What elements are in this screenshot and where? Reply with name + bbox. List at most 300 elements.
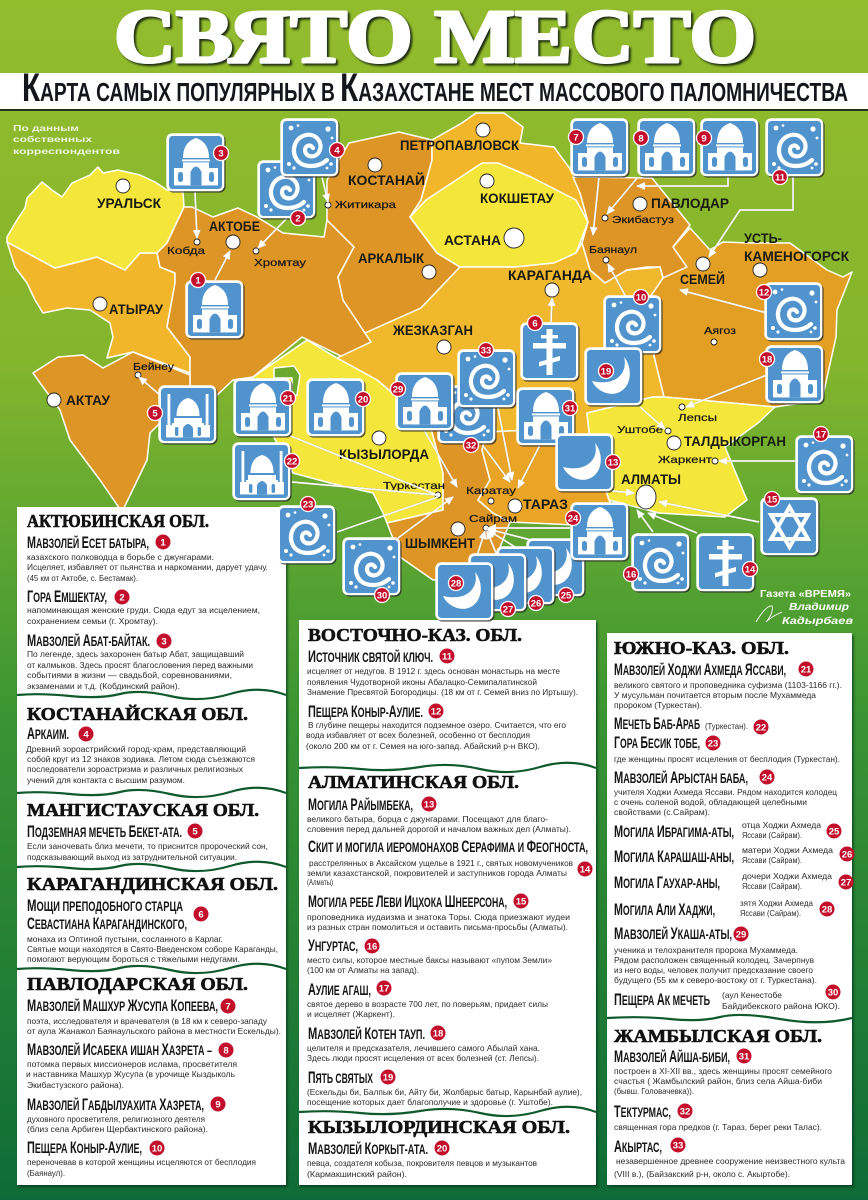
item 27: МОГИЛА ГАУХАР-АНЫ, (614, 874, 720, 892)
icon 21: mausoleum: 21 (283, 394, 294, 404)
arrow 19 (640, 407, 665, 429)
icon 8: mausoleum (634, 118, 697, 178)
icon 20: mausoleum (306, 378, 370, 438)
icon 1: mausoleum: 1 (195, 276, 201, 286)
arrow 28 (475, 531, 485, 562)
region: Павлодар (573, 177, 690, 283)
arrow 5 (139, 377, 160, 395)
item 9: 9 (215, 1100, 221, 1110)
item 10: ПЕЩЕРА КОНЫР-АУЛИЕ, (27, 1139, 142, 1157)
item 33: АКЫРТАС, (614, 1138, 662, 1156)
arrow 26 (488, 530, 515, 547)
icon 5: mosque (148, 385, 218, 445)
icon 19: crescent (584, 347, 644, 407)
arrow 9 (637, 177, 728, 186)
item 13: словения перед дальней дорогой и началом важных дел (Алматы). (307, 824, 571, 834)
city labels: КОКШЕТАУ (480, 190, 554, 206)
item 31: 31 (739, 1052, 750, 1062)
arrow 30 (398, 497, 453, 538)
icon 5: mosque: 5 (152, 408, 158, 420)
city labels: Кобда (167, 245, 205, 257)
icon 30: spiral: 30 (377, 590, 387, 602)
item 33 (614, 1138, 845, 1179)
arrow 25 (488, 529, 531, 540)
icon 17: spiral: 17 (816, 430, 826, 440)
item 25 (614, 820, 842, 841)
item 13: МОГИЛА РАЙЫМБЕКА, (308, 796, 413, 814)
item 18: МАВЗОЛЕЙ КОТЕН ТАУП. (308, 1025, 425, 1043)
arrow 33 (498, 408, 512, 480)
panel: middle column (299, 620, 596, 1185)
subtitle band (0, 66, 868, 111)
item 7: поэта, исследователя и врачевателя (в 18 км к северо-западу (27, 1016, 268, 1026)
item 1: МАВЗОЛЕЙ ЕСЕТ БАТЫРА, (27, 534, 149, 552)
item 9: духовного просветителя, религиозного деятеля (27, 1114, 205, 1124)
icon 18: mausoleum (760, 345, 825, 405)
icon 26: crescent: 26 (531, 598, 541, 610)
item 20: певца, создателя кобыза, покровителя певцов и музыкантов (307, 1158, 537, 1168)
icon 18: mausoleum: 18 (762, 354, 772, 366)
item 14 (307, 838, 592, 887)
region: Актау (33, 352, 190, 512)
item 30 (614, 984, 840, 1011)
icon 31: mausoleum (516, 387, 578, 447)
icon 19: crescent: 19 (601, 366, 611, 378)
item 7: МАВЗОЛЕЙ МАШХУР ЖУСУПА КОПЕЕВА, (27, 997, 218, 1015)
item 4: последователи зороастризма и различных религиозных (27, 764, 244, 774)
icon 26: crescent (496, 546, 556, 610)
arrow 11 (709, 177, 793, 257)
item 27: Яссави (Сайрам). (742, 881, 802, 891)
item 21: великого святого и проповедника суфизма (1103-1166 гг.). (614, 680, 842, 690)
arrow 12 (680, 290, 767, 313)
city labels: АКТОБЕ (209, 218, 260, 234)
item 8: Экибастузского района). (27, 1080, 124, 1090)
icon 16: spiral: 16 (626, 570, 636, 580)
item 12: В глубине пещеры находится подземное озеро. Считается, что его (308, 720, 566, 730)
item 7: 7 (225, 1002, 231, 1012)
item 31 (614, 1048, 832, 1096)
city labels: ПЕТРОПАВЛОВСК (400, 137, 519, 153)
icon 25: crescent (526, 538, 586, 602)
item 26 (614, 845, 854, 866)
icon 32: spiral: 32 (466, 440, 476, 452)
icon 15: star: 15 (767, 494, 778, 506)
item 14: СКИТ И МОГИЛА ИЕРОМОНАХОВ СЕРАФИМА И ФЕОГНОСТА, (308, 838, 588, 856)
city labels: КОСТАНАЙ (348, 171, 425, 188)
item 18: 18 (433, 1028, 443, 1040)
icon 7: mausoleum: 7 (573, 132, 579, 144)
item 29: Рядом расположен священный колодец. Зачерпнув (614, 955, 814, 965)
icon 33: spiral (457, 342, 517, 409)
section: Кызылординская область (307, 1117, 570, 1179)
region: Восточный Казахстан (650, 228, 852, 407)
arrow 10 (608, 264, 626, 297)
item 21: У мусульман почитается вторым после Мухаммеда (614, 690, 816, 700)
item 33: незавершенное древнее сооружение неизвестного культа (616, 1156, 845, 1166)
region: Астана (410, 163, 588, 267)
item 26: Яссави (Сайрам). (742, 855, 802, 865)
item 5: 5 (192, 826, 198, 838)
item 25: отца Ходжи Ахмеда (742, 820, 821, 830)
item 16: УНГУРТАС, (308, 937, 358, 955)
item 10: 10 (152, 1144, 162, 1154)
lake: Aral sea (274, 366, 300, 398)
item 32: 32 (680, 1106, 690, 1118)
region: Кызылорда (245, 340, 443, 523)
icon 24: mausoleum: 24 (568, 514, 579, 524)
icon 13: crescent (555, 433, 620, 493)
item 7: от аула Жанажол Баянаульского района в местности Ескельды). (27, 1026, 281, 1036)
icon 1: mausoleum (185, 272, 245, 340)
icon 8: mausoleum: 8 (638, 134, 644, 144)
city labels: ТАРАЗ (523, 496, 568, 512)
city labels: УРАЛЬСК (97, 195, 161, 211)
item 8: и наставника Машхур Жусупа (в урочище Кыздыколь (26, 1069, 236, 1079)
region: Шымкент (387, 425, 510, 580)
item 2: ГОРА ЕМШЕКТАУ, (27, 588, 107, 606)
item 19: ПЯТЬ СВЯТЫХ (308, 1069, 373, 1087)
item 4: собой круг из 12 знаков зодиака. Летом сюда съезжаются (27, 754, 255, 764)
city labels: Лепсы (678, 412, 717, 424)
item 23 (614, 734, 840, 764)
icon 10: spiral: 10 (636, 292, 646, 304)
item 10 (27, 1139, 256, 1178)
item 11 (307, 648, 578, 697)
city labels: Сайрам (469, 513, 517, 525)
arrow 21 (288, 435, 437, 495)
city labels: ШЫМКЕНТ (405, 535, 475, 551)
item 33: (VIII в.), (Байзакский р-н, около с. Акыртобе). (614, 1169, 790, 1179)
item 32 (614, 1103, 822, 1132)
heading: ЖАМБЫЛСКАЯ ОБЛ. (614, 1026, 822, 1046)
item 22: 22 (756, 722, 766, 734)
city labels: Бейнеу (133, 361, 175, 373)
icon 9: mausoleum (696, 118, 760, 178)
icon 10: spiral (603, 290, 663, 355)
item 15: МОГИЛА РЕБЕ ЛЕВИ ИЦХОКА ШНЕЕРСОНА, (308, 893, 507, 911)
item 26: МОГИЛА КАРАШАШ-АНЫ, (614, 848, 734, 866)
item 25: 25 (829, 826, 840, 838)
item 32: ТЕКТУРМАС, (614, 1103, 671, 1121)
heading: АЛМАТИНСКАЯ ОБЛ. (308, 772, 519, 792)
item 19 (307, 1069, 582, 1107)
map icons (148, 118, 855, 622)
item 24: с очень соленой водой, обладающей целебными (614, 797, 807, 807)
item 4: 4 (83, 730, 89, 740)
arrow 27 (487, 531, 496, 553)
item 4: АРКАИМ. (27, 725, 69, 743)
heading: КАРАГАНДИНСКАЯ ОБЛ. (27, 874, 278, 894)
item 8: потомка первых миссионеров ислама, просветителя (27, 1059, 237, 1069)
item 28 (614, 898, 834, 919)
item 17 (307, 980, 548, 1019)
item 21: МАВЗОЛЕЙ ХОДЖИ АХМЕДА ЯССАВИ, (614, 661, 786, 679)
region: Костанай (327, 132, 460, 333)
item 23: ГОРА БЕСИК ТОБЕ, (614, 734, 700, 752)
item 15: 15 (516, 896, 527, 908)
item 11: исцеляет от недугов. В 1912 г. здесь основан монастырь на месте (307, 666, 560, 676)
icon 4: spiral: 4 (334, 146, 340, 156)
heading: ВОСТОЧНО-КАЗ. ОБЛ. (308, 625, 522, 645)
item 19: 19 (383, 1072, 393, 1084)
icon 23: spiral: 23 (303, 500, 313, 510)
item 28: 28 (822, 904, 832, 916)
city labels: АЛМАТЫ (621, 471, 681, 487)
city labels: Туркестан (383, 480, 445, 492)
item 12: 12 (431, 706, 441, 718)
icon 17: spiral (795, 426, 855, 495)
icon 3: mausoleum (166, 133, 228, 193)
heading: ПАВЛОДАРСКАЯ ОБЛ. (27, 974, 248, 994)
arrow 6 (551, 298, 552, 322)
source note: корреспондентов (13, 146, 120, 156)
region: Алматы (587, 397, 775, 517)
item 29: будущего (55 км к северо-востоку от г. Туркестана). (614, 975, 817, 985)
icon 29: mausoleum: 29 (393, 384, 403, 396)
item 1: казахского полководца в борьбе с джунгарами. (27, 552, 214, 562)
icon 22: mosque (232, 442, 300, 502)
icon 21: mausoleum (233, 378, 296, 438)
arrow 23 (337, 497, 438, 532)
item 17: АУЛИЕ АГАШ, (308, 981, 371, 999)
item 6: СЕВАСТИАНА КАРАГАНДИНСКОГО, (27, 915, 187, 933)
item 2: 2 (119, 592, 125, 604)
item 33: 33 (673, 1140, 683, 1152)
region: Актобе (157, 207, 371, 397)
arrow 24 (488, 527, 570, 529)
heading: ЮЖНО-КАЗ. ОБЛ. (614, 638, 789, 658)
credit: Владимир (789, 602, 849, 613)
item 11: появления Чудотворной иконы Абалацко-Семипалатинской (307, 677, 537, 687)
item 29: из него воды, человек получит предсказание своего (614, 965, 813, 975)
arrow 29 (424, 430, 457, 487)
item 23: 23 (708, 738, 718, 750)
source note: По данным (13, 123, 79, 133)
item 15 (307, 893, 570, 932)
item 25: МОГИЛА ИБРАГИМА-АТЫ, (614, 823, 734, 841)
item 19: (Ескельды би, Балпык би, Айту би, Жолбарыс батыр, Карынбай аулие), (307, 1087, 582, 1097)
icon 12: spiral (756, 282, 824, 342)
icon 16: spiral (624, 533, 691, 593)
arrow 22 (292, 482, 437, 495)
item 11: 11 (442, 652, 453, 662)
icon 6: cross (520, 316, 580, 382)
icon 31: mausoleum: 31 (565, 404, 576, 414)
item 30: (аул Кенестобе (722, 990, 782, 1000)
city labels: ПАВЛОДАР (651, 195, 729, 211)
item 24: свойствами (с.Сайрам). (614, 807, 710, 817)
item 29: МАВЗОЛЕЙ УКАША-АТЫ, (614, 925, 732, 943)
item 16: (100 км от Алматы на запад). (307, 965, 419, 975)
icon 9: mausoleum: 9 (701, 134, 707, 144)
item 31: (бывш. Головачевка)). (614, 1086, 694, 1096)
arrow 13 (612, 491, 634, 493)
item 3: МАВЗОЛЕЙ АБАТ-БАЙТАК. (27, 632, 150, 650)
item 22 (614, 715, 768, 734)
item 29: ученика и телохранителя пророка Мухаммеда. (614, 945, 798, 955)
city labels: Баянаул (589, 244, 637, 256)
city labels: Хромтау (254, 257, 307, 269)
city labels: КАРАГАНДА (508, 267, 592, 283)
item 9: (близ села Арбиген Щербактинского района). (27, 1124, 208, 1134)
icon 27: crescent: 27 (503, 604, 513, 616)
item 25: Яссави (Сайрам). (742, 830, 802, 840)
source note (13, 123, 120, 156)
item 29: 29 (736, 930, 746, 940)
item 4: Древний зороастрийский город-храм, представляющий (26, 744, 246, 754)
item 23: где женщины просят исцеления от бесплодия (Туркестан). (614, 754, 840, 764)
item 4: учений для контакта с высшим разумом. (27, 775, 185, 785)
city labels: Житикара (335, 199, 396, 211)
item 27 (614, 871, 854, 892)
item 29 (614, 925, 817, 985)
item 14: (Алматы) (307, 877, 333, 887)
icon 29: mausoleum (390, 372, 455, 432)
item 3: от калмыков. Здесь просят благословения перед важными (27, 660, 253, 670)
item 14: 14 (580, 864, 591, 876)
city labels: ТАЛДЫКОРГАН (684, 433, 786, 449)
item 18 (307, 1025, 540, 1063)
item 22: (Туркестан). (705, 721, 748, 731)
item 2: напоминающая женские груди. Сюда едут за исцелением, (27, 605, 260, 615)
item 17: и исцеляет (Жаркент). (307, 1009, 395, 1019)
arrow 31 (518, 445, 540, 488)
item 4 (26, 725, 255, 785)
item 32: священная гора предков (г. Тараз, берег реки Талас). (614, 1122, 822, 1132)
section: Карагандинская область (27, 874, 278, 964)
item 27: дочери Ходжи Ахмеда (742, 871, 832, 881)
arrow 4 (322, 177, 328, 202)
arrow 1 (215, 251, 230, 280)
section: Южно-Казахстанская область (614, 638, 854, 1011)
heading: АКТЮБИНСКАЯ ОБЛ. (27, 511, 209, 531)
credit: Газета «ВРЕМЯ» (760, 589, 851, 600)
icon 3: mausoleum: 3 (218, 148, 224, 160)
city labels: КАМЕНОГОРСК (744, 248, 849, 264)
item 20: МАВЗОЛЕЙ КОРКЫТ-АТА. (308, 1140, 428, 1158)
item 12: вода избавляет от всех болезней, особенно от бесплодия (306, 730, 530, 740)
city labels: Жаркент (658, 454, 712, 466)
item 31: построен в XI-XII вв., здесь женщины просят семейного (614, 1066, 832, 1076)
item 28: Яссави (Сайрам). (740, 908, 801, 918)
icon 7: mausoleum (568, 118, 630, 178)
item 14: земли казахстанской, покровителей и заступников города Алматы (307, 868, 567, 878)
item 20: 20 (437, 1144, 447, 1154)
item 26: 26 (842, 850, 852, 860)
item 26: матери Ходжи Ахмеда (742, 845, 833, 855)
item 16: место силы, которое местные баксы называют «пупом Земли» (307, 955, 552, 965)
item 15: из разных стран помолиться и оставить письма-просьбы (Алматы). (307, 922, 568, 932)
arrow 16 (637, 510, 653, 532)
item 14: расстрелянных в Аксайском ущелье в 1921 г., святых новомучеников (309, 858, 573, 868)
item 5: ПОДЗЕМНАЯ МЕЧЕТЬ БЕКЕТ-АТА. (27, 823, 182, 841)
section: Мангистауская область (27, 800, 268, 862)
item 9: МАВЗОЛЕЙ ГАБДЫЛУАХИТА ХАЗРЕТА, (27, 1096, 204, 1114)
heading: МАНГИСТАУСКАЯ ОБЛ. (27, 800, 259, 820)
item 6: Святые мощи находятся в Свято-Введенском соборе Караганды, (27, 944, 278, 954)
item 12: ПЕЩЕРА КОНЫР-АУЛИЕ. (308, 703, 423, 721)
city labels: Каратау (466, 485, 517, 497)
city labels: УСТЬ- (744, 230, 782, 246)
item 21: 21 (801, 664, 812, 676)
item 8: 8 (223, 1046, 229, 1056)
icon 4: spiral (280, 118, 344, 178)
item 24 (614, 769, 837, 817)
heading: КОСТАНАЙСКАЯ ОБЛ. (27, 703, 248, 724)
item 1: (45 км от Актобе, с. Бестамак). (27, 573, 138, 583)
arrow 3 (195, 192, 197, 238)
icon 22: mosque: 22 (287, 456, 297, 468)
section: Жамбылская область (614, 1026, 845, 1179)
item 18: целителя и предсказателя, лечившего самого Абылай хана. (307, 1043, 540, 1053)
item 24: МАВЗОЛЕЙ АРЫСТАН БАБА, (614, 769, 748, 787)
item 1: 1 (160, 538, 166, 548)
section: Алматинская область (307, 772, 592, 1107)
item 8: МАВЗОЛЕЙ ИСАБЕКА ИШАН ХАЗРЕТА – (27, 1041, 212, 1059)
item 24: 24 (762, 772, 773, 784)
item 27: 27 (841, 878, 851, 888)
item 18: Здесь люди просят исцеления от всех болезней (ст. Лепсы). (307, 1053, 539, 1063)
city labels: Экибастуз (612, 214, 674, 226)
icon 28: crescent (435, 562, 495, 622)
icon 30: spiral (342, 537, 402, 602)
item 3: экзаменами и т.д. (Кобдинский район). (27, 681, 180, 691)
region: Атырау (7, 242, 190, 373)
item 5 (27, 823, 268, 862)
item 20 (307, 1140, 537, 1179)
item 5: Если заночевать близ мечети, то приснится пророческий сон, (27, 841, 268, 851)
icon 20: mausoleum: 20 (358, 394, 368, 406)
item 30: ПЕЩЕРА АК МЕЧЕТЬ (614, 991, 710, 1009)
icon 27: crescent (468, 553, 528, 616)
icon 11: spiral: 11 (775, 172, 786, 184)
icon 33: spiral: 33 (481, 346, 491, 356)
region: Петропавловск (410, 113, 588, 253)
arrow 18 (686, 375, 767, 407)
item 6: 6 (198, 910, 204, 920)
section: Павлодарская область (26, 974, 281, 1178)
icon 12: spiral: 12 (759, 288, 769, 298)
item 28: МОГИЛА АЛИ ХАДЖИ, (614, 901, 715, 919)
city labels: АТЫРАУ (109, 301, 163, 317)
item 6: помогают верующим бороться с тяжелыми недугами. (27, 954, 240, 964)
icon 2: spiral: 2 (295, 214, 301, 224)
arrow 2 (258, 217, 288, 248)
city labels (66, 137, 849, 551)
credit (756, 589, 853, 627)
icon 25: crescent: 25 (561, 590, 572, 602)
item 24: учителя Ходжи Ахмеда Яссави. Рядом находится колодец (614, 787, 837, 797)
region: Тараз (478, 430, 620, 525)
section: Костанайская область (26, 703, 255, 785)
item 22: МЕЧЕТЬ БАБ-АРАБ (614, 715, 700, 733)
item 21 (614, 661, 842, 710)
item 11: Знамение Пресвятой Богородицы. (18 км от г. Семей вниз по Иртышу). (307, 687, 578, 697)
heading: КЫЗЫЛОРДИНСКАЯ ОБЛ. (308, 1117, 570, 1137)
icon 14: cross: 14 (745, 564, 756, 576)
item 9 (27, 1096, 226, 1134)
icon 6: cross: 6 (532, 318, 538, 330)
item 15: проповедника иудаизма и знатока Торы. Сюда приезжают иудеи (307, 912, 570, 922)
item 12 (306, 703, 566, 751)
item 12: (около 200 км от г. Семея на юго-запад. Абайский р-н ВКО). (306, 741, 540, 751)
city labels: СЕМЕЙ (680, 270, 725, 287)
section: Восточно-Казахстанская область (306, 625, 578, 751)
city labels: Аягоз (704, 325, 736, 337)
section: Актюбинская область (27, 511, 268, 691)
item 3: По легенде, здесь захоронен батыр Абат, защищавший (27, 649, 244, 659)
